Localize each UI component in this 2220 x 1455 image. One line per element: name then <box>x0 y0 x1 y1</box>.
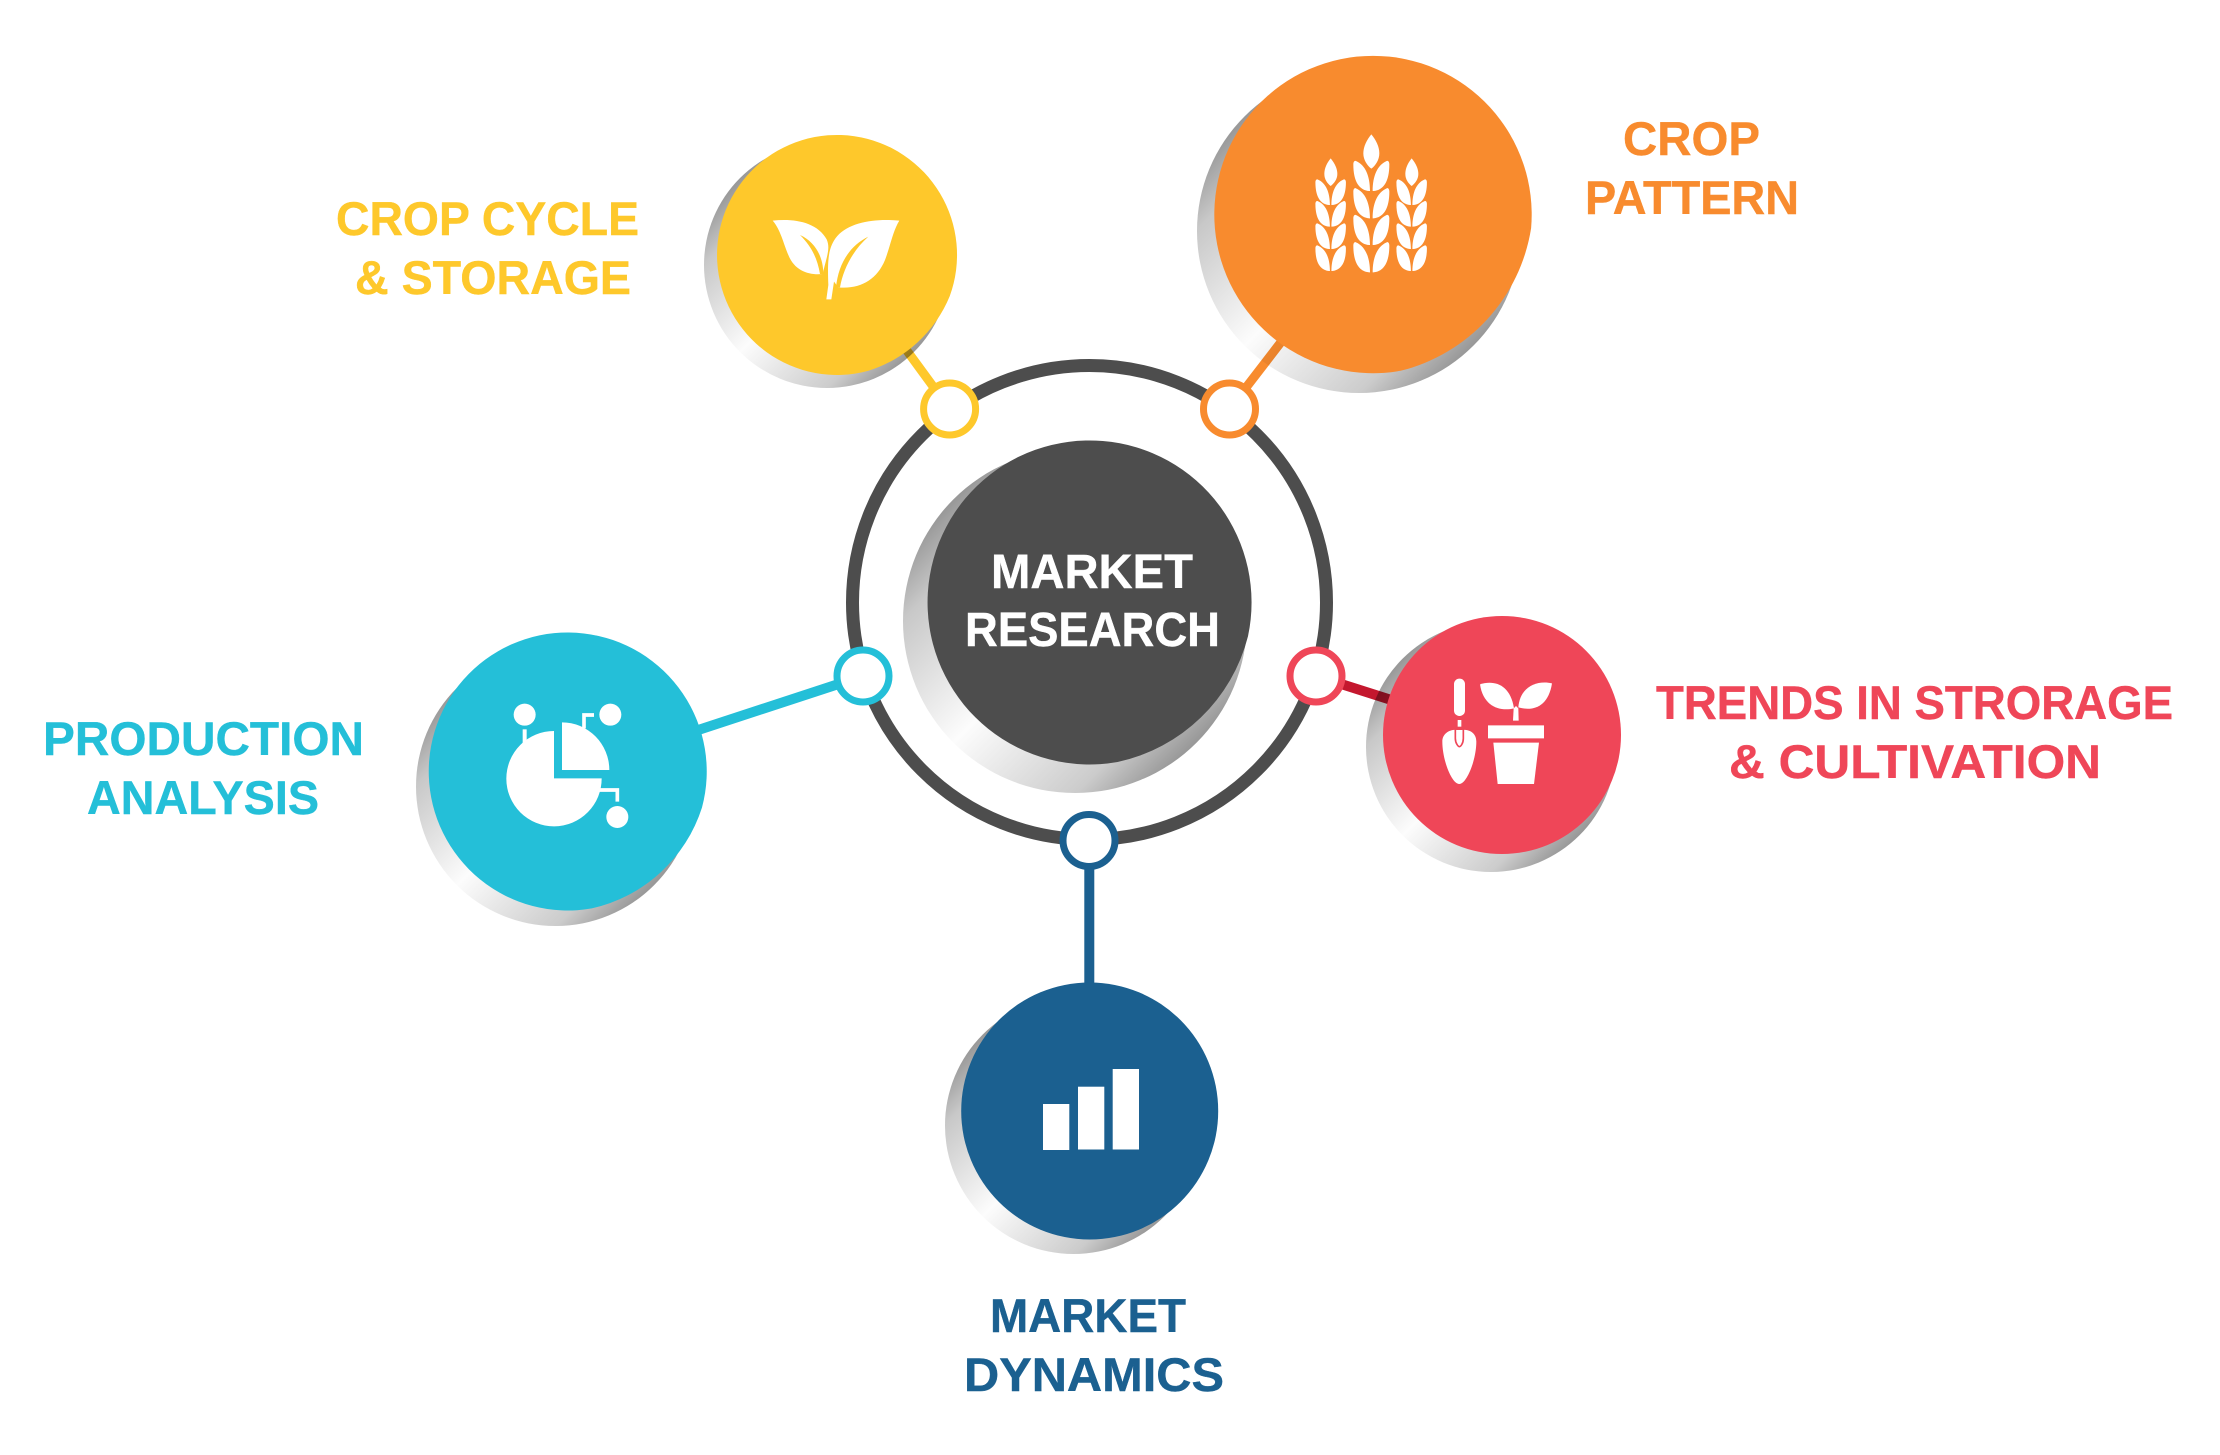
shadow: blue circle <box>945 997 1202 1254</box>
shadow: orange circle <box>1197 69 1521 393</box>
connector: yellow <box>894 333 950 409</box>
label: market dynamics: MARKET <box>990 1289 1186 1342</box>
label: trends in storage and cultivation: TRENDS IN STRORAGE <box>1656 676 2173 729</box>
connector: blue <box>1084 840 1094 1000</box>
connector: orange <box>1230 320 1298 409</box>
node: yellow <box>924 383 976 435</box>
label: market dynamics <box>964 1289 1224 1401</box>
panel: market dynamics <box>945 814 1224 1401</box>
label: production analysis <box>43 712 364 824</box>
hub title <box>965 546 1220 657</box>
label: crop pattern: CROP <box>1623 112 1760 165</box>
hub shadow <box>903 449 1247 793</box>
panel: trends in storage and cultivation <box>1290 616 2173 872</box>
icon: wheat <box>1315 134 1427 272</box>
label: production analysis: ANALYSIS <box>87 771 319 824</box>
central ring <box>852 366 1326 840</box>
hub circle <box>928 440 1252 764</box>
panel: market research hub <box>903 440 1252 793</box>
icon: leaves <box>773 220 899 299</box>
label: crop pattern <box>1585 112 1799 224</box>
circle: yellow <box>717 135 957 375</box>
circle: orange <box>1214 56 1532 373</box>
hub title: RESEARCH <box>965 604 1220 657</box>
panel: production analysis <box>43 632 889 926</box>
label: trends in storage and cultivation: & CULTIVATION <box>1729 735 2101 788</box>
label: crop cycle and storage: CROP CYCLE <box>336 192 639 245</box>
circle: red <box>1383 616 1621 854</box>
label: crop pattern: PATTERN <box>1585 171 1799 224</box>
node: cyan <box>837 650 889 702</box>
label: market dynamics: DYNAMICS <box>964 1348 1224 1401</box>
icon: bar chart <box>1043 1069 1139 1150</box>
icon: trowel and potted plant <box>1442 679 1552 784</box>
label: production analysis: PRODUCTION <box>43 712 364 765</box>
label: trends in storage and cultivation <box>1656 676 2173 788</box>
panel: crop cycle and storage <box>336 135 976 435</box>
node: red <box>1290 650 1342 702</box>
shadow: red circle <box>1366 622 1616 872</box>
hub title: MARKET <box>991 546 1193 599</box>
shadow: yellow circle <box>704 142 950 388</box>
connector: cyan <box>680 676 863 736</box>
node: orange <box>1204 383 1256 435</box>
circle: cyan <box>429 632 707 910</box>
label: crop cycle and storage: & STORAGE <box>355 251 631 304</box>
label: crop cycle and storage <box>336 192 639 304</box>
icon: pie chart <box>506 704 628 828</box>
shadow: cyan circle <box>416 647 695 926</box>
panel: crop pattern <box>1197 56 1799 435</box>
node: blue <box>1063 814 1115 866</box>
circle: blue <box>961 982 1218 1240</box>
connector: red <box>1316 676 1410 706</box>
